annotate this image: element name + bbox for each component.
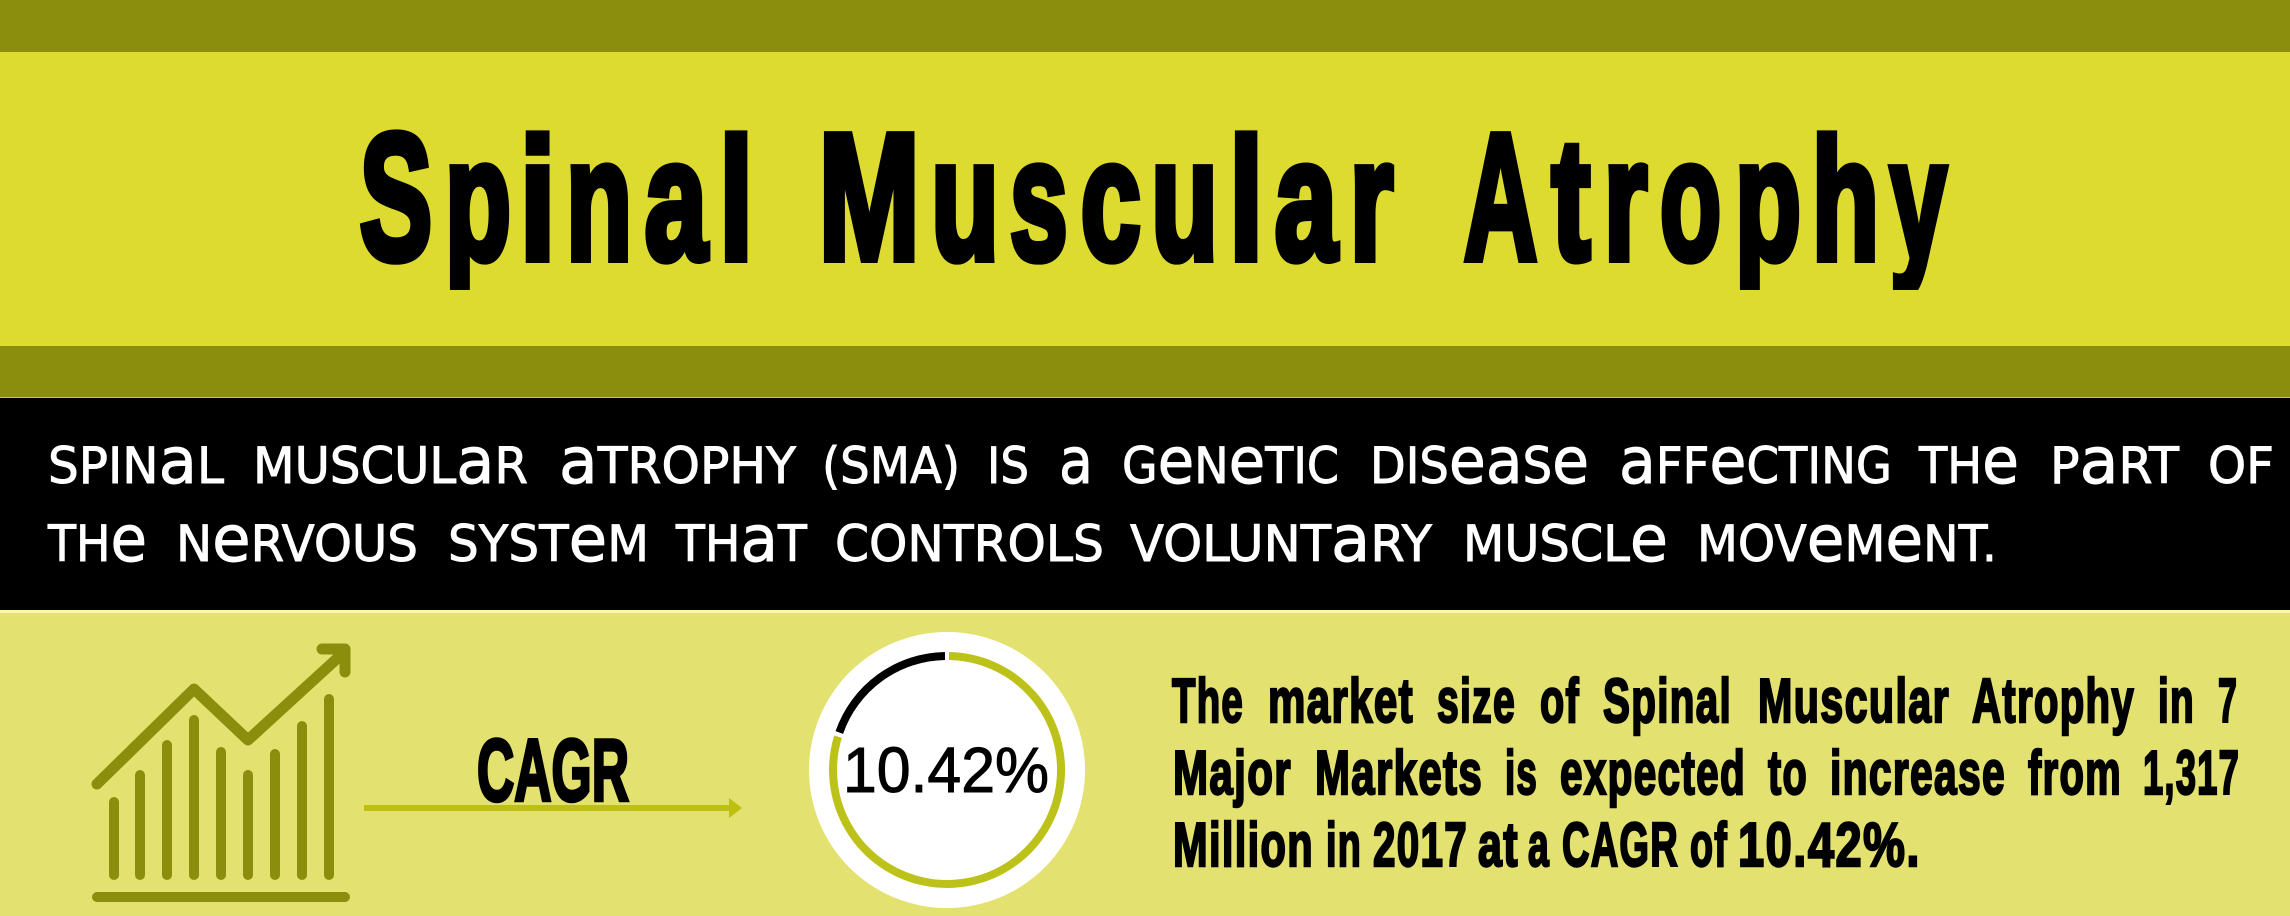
market size description: Markets bbox=[1315, 739, 1483, 808]
title: n bbox=[566, 104, 632, 296]
panel: definition bbox=[0, 397, 2290, 610]
market size description: increase bbox=[1830, 739, 2006, 808]
market size description: Muscular bbox=[1758, 667, 1950, 736]
market size description: expected bbox=[1560, 739, 1746, 808]
market size description: Major bbox=[1173, 739, 1292, 808]
panel: title banner bbox=[0, 0, 2290, 398]
definition text: MUSCULaR bbox=[253, 425, 528, 499]
title: u bbox=[931, 104, 999, 296]
title: u bbox=[1151, 104, 1218, 296]
market size description: Atrophy bbox=[1972, 667, 2135, 736]
definition text: VOLUNTaRY bbox=[1130, 503, 1433, 577]
definition text: NeRVOUS bbox=[176, 503, 418, 577]
title: a bbox=[1275, 104, 1338, 296]
definition text: GeNeTIC bbox=[1122, 425, 1339, 499]
definition text: DISeaSe bbox=[1370, 425, 1589, 499]
definition text: (SMA) bbox=[822, 437, 960, 495]
title: A bbox=[1464, 97, 1537, 298]
market size description: market bbox=[1268, 667, 1414, 736]
title: t bbox=[1552, 104, 1590, 296]
market size description: at bbox=[1478, 811, 1519, 880]
market size description: Spinal bbox=[1603, 667, 1732, 736]
definition text: SPINaL bbox=[48, 425, 224, 499]
title: s bbox=[1010, 104, 1068, 296]
definition text: MOVeMeNT. bbox=[1697, 503, 1997, 577]
title: l bbox=[1229, 104, 1263, 296]
market size description: from bbox=[2028, 739, 2122, 808]
title: y bbox=[1890, 104, 1947, 296]
market size description: is bbox=[1505, 739, 1538, 808]
market size description: in bbox=[1326, 811, 1362, 880]
title: l bbox=[719, 104, 753, 296]
market size description: 10.42%. bbox=[1738, 811, 1921, 880]
title: p bbox=[1735, 104, 1801, 296]
definition text: OF bbox=[2208, 437, 2274, 495]
market size description: Million bbox=[1173, 811, 1314, 880]
arrow: CAGR pointer bbox=[364, 798, 742, 818]
title: a bbox=[645, 104, 708, 296]
title: o bbox=[1660, 104, 1721, 296]
title: h bbox=[1812, 104, 1879, 296]
panel: market statistics bbox=[0, 610, 2290, 916]
market size description: of bbox=[1690, 811, 1728, 880]
definition text: SYSTeM bbox=[448, 503, 649, 577]
definition text: IS bbox=[987, 437, 1029, 495]
title: p bbox=[445, 104, 511, 296]
icon: rising bar chart with arrow bbox=[92, 649, 350, 902]
CAGR label: CAGR bbox=[477, 720, 629, 820]
definition text: MUSCLe bbox=[1463, 503, 1668, 577]
title: c bbox=[1081, 104, 1141, 296]
definition text: a bbox=[1059, 425, 1093, 499]
title: S bbox=[360, 97, 432, 298]
market size description: of bbox=[1540, 667, 1580, 736]
market size description: The bbox=[1172, 667, 1244, 736]
definition text: THaT bbox=[675, 503, 808, 577]
market size description: in bbox=[2158, 667, 2195, 736]
chart: CAGR progress ring bbox=[809, 632, 1085, 908]
market size description: to bbox=[1768, 739, 1808, 808]
market size description: a bbox=[1528, 811, 1550, 880]
title: r bbox=[1350, 104, 1393, 296]
title: M bbox=[818, 97, 920, 298]
definition text bbox=[47, 425, 2274, 577]
definition text: PaRT bbox=[2050, 425, 2180, 499]
market size description bbox=[1172, 667, 2240, 880]
market size description: size bbox=[1437, 667, 1516, 736]
market size description: CAGR bbox=[1562, 811, 1679, 880]
definition text: aTROPHY bbox=[559, 425, 797, 499]
definition text: THe bbox=[47, 503, 147, 577]
title: r bbox=[1604, 104, 1647, 296]
title: i bbox=[520, 104, 556, 296]
definition text: CONTROLS bbox=[835, 515, 1104, 573]
market size description: 7 bbox=[2218, 667, 2238, 736]
definition text: THe bbox=[1918, 425, 2019, 499]
market size description: 2017 bbox=[1373, 811, 1468, 880]
ring value: 10.42% bbox=[843, 734, 1049, 806]
definition text: aFFeCTING bbox=[1619, 425, 1892, 499]
title bbox=[360, 129, 1950, 290]
